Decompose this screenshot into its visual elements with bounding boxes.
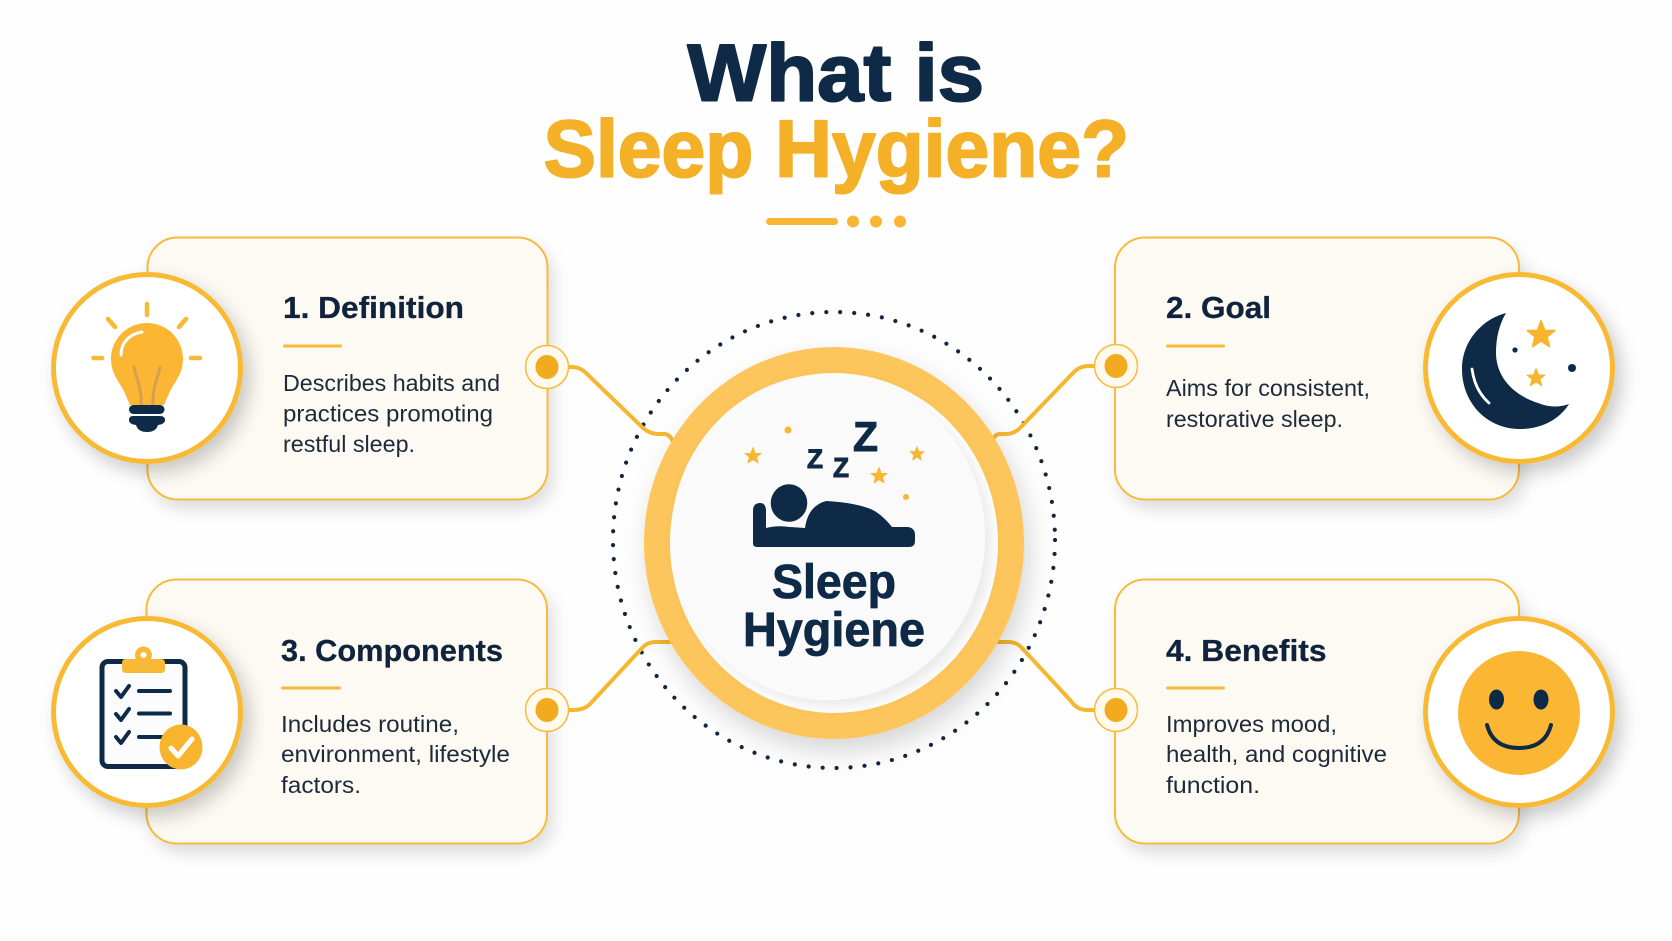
title divider [766,216,906,228]
card [1115,580,1519,844]
title line 2: Sleep Hygiene? [544,104,1129,194]
icon: sleeping person [753,484,915,547]
body text: function. [1166,772,1260,798]
inner raised disc [671,374,985,700]
heading underline [281,686,341,690]
title line 1: What is [688,28,984,118]
connector node [526,346,568,388]
icon: snore letters [807,413,878,483]
heading: 3. Components [281,633,503,668]
heading underline [283,344,342,348]
central badge [644,347,1024,739]
icon circle [1426,274,1612,462]
body text: health, and cognitive [1166,741,1387,767]
body text: Aims for consistent, [1166,375,1370,401]
body text [283,370,500,457]
body text: factors. [281,772,361,798]
body text: restorative sleep. [1166,406,1343,432]
icon: light bulb [94,304,200,432]
heading: 1. Definition [283,290,464,325]
badge label: Hygiene [743,604,925,657]
icon: snore letters: Z [807,444,823,474]
title [544,28,1129,194]
connector node [526,688,568,732]
icon circle [1426,618,1612,806]
body text: Improves mood, [1166,711,1337,737]
outer yellow ring [644,347,1024,739]
body text: Includes routine, [281,711,459,737]
card [1115,238,1519,500]
body text [1166,375,1370,432]
body text: Describes habits and [283,370,500,396]
card [146,580,547,844]
icon: smiley face [1458,651,1580,775]
panel: goal [1094,238,1612,500]
white disc [670,373,998,713]
icon: snore letters: Z [853,413,878,460]
body text: practices promoting [283,400,493,426]
body text: environment, lifestyle [281,741,510,767]
connector node [1094,344,1138,388]
connector lines [567,366,1096,710]
heading underline [1166,686,1225,690]
panel: benefits [1094,580,1612,844]
icon: moon and stars [1462,313,1576,429]
body text: restful sleep. [283,431,415,457]
panel: components [54,580,568,844]
connector node [1094,688,1138,732]
icon: snore letters: Z [833,452,849,483]
heading underline [1166,344,1225,348]
heading: 4. Benefits [1166,633,1326,668]
dotted orbit ring [613,312,1055,768]
icon circle [54,618,240,806]
card [148,238,548,500]
icon: clipboard checklist [102,646,202,770]
body text [281,711,510,798]
icon circle [54,274,240,462]
body text [1166,711,1387,798]
badge label: Sleep [772,556,896,609]
panel: definition [54,238,568,500]
heading: 2. Goal [1166,290,1271,325]
icon: stars and dots [745,427,924,500]
badge label [743,556,925,657]
